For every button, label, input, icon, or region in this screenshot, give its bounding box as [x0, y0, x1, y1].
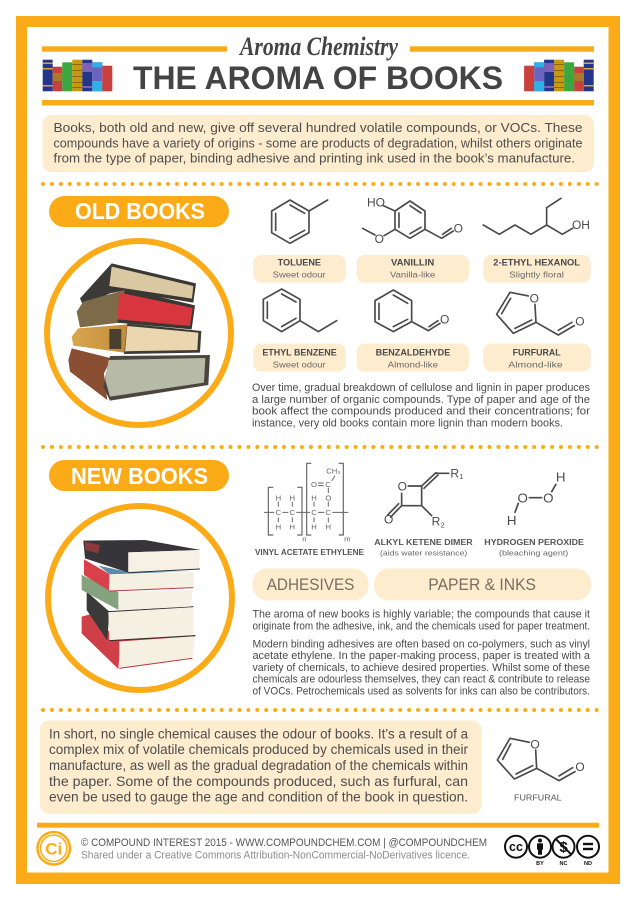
molecule: vanillin: HO [367, 195, 385, 209]
molecule: furfural: O [575, 314, 585, 328]
label boxes: old book compounds: FURFURAL [513, 347, 561, 357]
heading: new books: NEW BOOKS [71, 463, 208, 489]
panel: summary: In short, no single chemical causes the odour of books. It’s a result of a [49, 726, 468, 741]
molecule: vinyl acetate ethylene: H [290, 522, 295, 531]
molecule: vinyl acetate ethylene: H [311, 522, 317, 531]
heading: old books [49, 196, 229, 227]
main title: THE AROMA OF BOOKS [133, 60, 503, 96]
text: new books description: Modern binding adhesives are often based on co-polymers, such as vinyl [252, 638, 590, 650]
molecule: toluene [272, 200, 328, 243]
panel: summary: even be used to gauge the age and condition of the book in question. [49, 790, 468, 805]
molecule: vinyl acetate ethylene: C [311, 508, 317, 517]
logo: compound interest: Ci [45, 840, 62, 858]
label boxes: old book compounds: Sweet odour [273, 270, 326, 279]
molecule: hydrogen peroxide: H [556, 469, 565, 484]
molecule: vanillin [363, 195, 463, 246]
molecule: 2-ethyl hexanol: OH [572, 218, 590, 232]
molecule: vinyl acetate ethylene [255, 463, 365, 557]
molecule: furfural [497, 291, 585, 335]
molecule: vinyl acetate ethylene: m [344, 535, 351, 544]
molecule: hydrogen peroxide: H [507, 513, 516, 528]
molecule: vinyl acetate ethylene: H [276, 494, 281, 503]
molecule: hydrogen peroxide [484, 469, 585, 557]
text: new books description: variety of chemicals, to achieve desired properties. Whilst some of these [252, 662, 590, 674]
icon: creative commons licence: cc [509, 840, 523, 854]
molecule: vinyl acetate ethylene: n [302, 535, 306, 544]
text: new books description: chemicals are odourless themselves, they can react & contribute to release [252, 674, 590, 686]
molecule: alkyl ketene dimer: R [450, 466, 459, 480]
molecule: vinyl acetate ethylene: C [326, 508, 332, 517]
label boxes: old book compounds: BENZALDEHYDE [376, 347, 450, 357]
molecule: alkyl ketene dimer [374, 466, 473, 557]
text: old books description: book affect the compounds produced and their concentrations; for [252, 406, 591, 418]
molecule: ethyl benzene [263, 289, 337, 332]
molecule: vinyl acetate ethylene: O [311, 480, 317, 489]
molecule: hydrogen peroxide: O [517, 490, 528, 505]
label boxes: old book compounds [253, 255, 591, 372]
icon: creative commons licence: BY [536, 861, 544, 867]
molecule: alkyl ketene dimer: O [398, 480, 407, 494]
molecule: vanillin: O [454, 222, 463, 236]
icon: creative commons licence: NC [560, 861, 567, 867]
header [42, 32, 594, 105]
footer [36, 823, 599, 867]
molecule: alkyl ketene dimer: O [384, 513, 393, 527]
label boxes: old book compounds: 2-ETHYL HEXANOL [493, 257, 580, 267]
text: credits: © COMPOUND INTEREST 2015 - WWW.COMPOUNDCHEM.COM | @COMPOUNDCHEM [81, 837, 487, 849]
molecule: vinyl acetate ethylene: H [326, 522, 331, 531]
text: credits: Shared under a Creative Commons Attribution-NonCommercial-NoDerivatives licence. [81, 850, 470, 862]
molecule: 2-ethyl hexanol [483, 198, 590, 234]
molecule: alkyl ketene dimer: 1 [459, 472, 463, 481]
molecule: vanillin: O [375, 232, 384, 246]
molecule: vinyl acetate ethylene: C [290, 508, 296, 517]
label: paper and inks [374, 568, 591, 600]
intro panel: Books, both old and new, give off several hundred volatile compounds, or VOCs. These [54, 120, 582, 135]
text: old books description: Over time, gradual breakdown of cellulose and lignin in paper produces [252, 382, 590, 394]
molecule: alkyl ketene dimer: 2 [441, 520, 445, 529]
series title: Aroma Chemistry [238, 32, 398, 61]
molecule: alkyl ketene dimer: R [432, 515, 441, 529]
heading: old books: OLD BOOKS [75, 198, 205, 224]
molecules: new book compounds [255, 463, 585, 557]
molecule: hydrogen peroxide: O [543, 490, 553, 505]
molecules: old book compounds [253, 195, 591, 372]
icon: right row of books [524, 60, 594, 91]
text: old books description: instance, very old books contain more lignin than modern books. [252, 417, 563, 429]
icon: creative commons licence: ND [584, 861, 592, 867]
text: new books description: The aroma of new books is highly variable; the compounds that cause it [252, 609, 590, 621]
molecule: benzaldehyde: O [440, 312, 449, 326]
text: new books description: acetate ethylene. In the paper-making process, paper is treated with a [252, 650, 590, 662]
text: new books description: of VOCs. Petrochemicals used as solvents for inks can also be contributors. [252, 685, 590, 697]
logo: compound interest [36, 831, 71, 866]
molecule: alkyl ketene dimer: ALKYL KETENE DIMER [374, 538, 473, 547]
photo: new books stack [48, 506, 232, 690]
panel: summary [40, 720, 482, 814]
heading: new books [49, 460, 229, 491]
molecule: vinyl acetate ethylene: VINYL ACETATE ETHYLENE [255, 548, 365, 557]
molecule: hydrogen peroxide: (bleaching agent) [499, 548, 569, 557]
molecule: vinyl acetate ethylene: H [311, 494, 317, 503]
molecule: furfural summary [497, 737, 585, 803]
molecule: vinyl acetate ethylene: H [276, 522, 281, 531]
text: new books description: originate from the adhesive, ink, and the chemicals used for paper treatment. [252, 620, 590, 632]
icon: creative commons licence [505, 836, 599, 867]
intro panel: from the type of paper, binding adhesive and printing ink used in the book’s manufacture. [54, 151, 575, 166]
molecule: vinyl acetate ethylene: C [276, 508, 282, 517]
label boxes: old book compounds: Sweet odour [273, 360, 326, 369]
molecule: furfural: O [530, 291, 539, 305]
intro panel [42, 115, 594, 172]
panel: new books [48, 460, 591, 697]
icon: left row of books [43, 60, 112, 91]
text: old books description: a large number of organic compounds. Type of paper and age of the [252, 394, 590, 406]
intro panel: compounds have a variety of origins - some are products of degradation, whilst others originate [54, 135, 582, 150]
label: adhesives [252, 568, 368, 600]
molecule: alkyl ketene dimer: (aids water resistance) [380, 548, 468, 557]
label: paper and inks: PAPER & INKS [428, 576, 536, 594]
label boxes: old book compounds: Slightly floral [509, 270, 564, 279]
icon: creative commons licence: $ [559, 839, 568, 856]
molecule: vinyl acetate ethylene: CH₃ [326, 467, 340, 476]
label boxes: old book compounds: TOLUENE [278, 257, 321, 267]
label: adhesives: ADHESIVES [267, 576, 354, 594]
molecule: vinyl acetate ethylene: O [325, 494, 331, 503]
label boxes: old book compounds: Almond-like [388, 360, 439, 369]
molecule: furfural summary: O [575, 760, 585, 774]
text: old books description [252, 382, 591, 429]
photo: old books stack [47, 241, 231, 425]
panel: summary: manufacture, as well as the gradual degradation of the chemicals within [49, 758, 468, 773]
molecule: vinyl acetate ethylene: H [290, 494, 295, 503]
molecule: furfural summary: O [530, 737, 540, 751]
label boxes: old book compounds: ETHYL BENZENE [262, 347, 337, 357]
label boxes: old book compounds: Almond-like [508, 360, 563, 369]
panel: summary: the paper. Some of the compounds produced, such as furfural, can [49, 774, 468, 789]
molecule: furfural summary: FURFURAL [514, 793, 562, 803]
molecule: benzaldehyde [375, 290, 449, 332]
text: credits [81, 837, 487, 862]
molecule: hydrogen peroxide: HYDROGEN PEROXIDE [484, 538, 585, 547]
label boxes: old book compounds: VANILLIN [391, 257, 434, 267]
molecule: vinyl acetate ethylene: C [325, 480, 331, 489]
text: new books description [252, 609, 590, 697]
label boxes: old book compounds: Vanilla-like [390, 270, 436, 279]
panel: summary: complex mix of volatile chemicals produced by chemicals used in their [49, 742, 468, 757]
panel: old books [47, 195, 591, 429]
